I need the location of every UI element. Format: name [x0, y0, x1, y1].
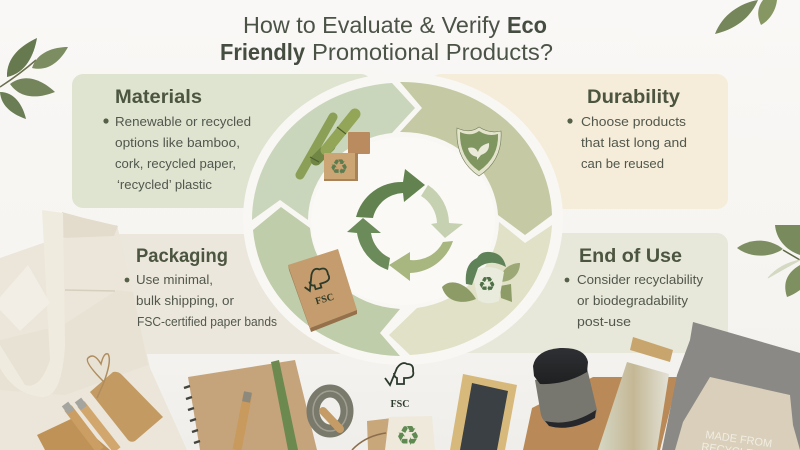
icon: recycled cup with leaves: ♻: [478, 272, 496, 296]
panel: durability: [430, 74, 728, 209]
heading: packaging: Packaging: [136, 246, 228, 267]
body: end of use: Consider recyclability: [577, 272, 704, 287]
body: packaging: bulk shipping, or: [136, 293, 235, 308]
icon: FSC kraft box: [288, 249, 357, 332]
leaves: top left: [0, 38, 68, 119]
felt pouch: [662, 322, 800, 450]
icon: eco shield: [457, 127, 501, 176]
cord coil: [313, 391, 347, 431]
materials text: [103, 87, 251, 192]
cycle ring: [252, 82, 552, 356]
ring backing: [243, 73, 563, 365]
leaves: right: [737, 225, 800, 297]
tote bag: [0, 210, 187, 450]
central cycle arrows: [347, 169, 463, 281]
durability text: [567, 87, 687, 171]
ring segment: end of use: [389, 222, 552, 355]
drawstring bag: [675, 377, 800, 450]
tote card: [0, 265, 50, 331]
bullet: [125, 278, 129, 282]
bamboo pens: [68, 408, 100, 450]
notebook: [184, 360, 317, 450]
arrow: olive bottom: [389, 241, 453, 281]
icon: bamboo, cork and recycled box: [300, 114, 370, 181]
ring segment: durability: [400, 82, 552, 235]
title: Friendly: [220, 39, 305, 65]
body: durability: Choose products: [581, 114, 687, 129]
icon: recycled cup with leaves: [442, 252, 520, 303]
panel: packaging: [100, 234, 340, 354]
body: packaging: [136, 272, 277, 329]
FSC logo: [385, 363, 413, 410]
elastic band: [271, 360, 298, 450]
bullet: [103, 118, 109, 124]
title: Promotional Products?: [312, 39, 553, 65]
heading: materials: Materials: [115, 87, 202, 108]
end of use text: [565, 246, 704, 329]
bullet: [567, 118, 573, 124]
body: durability: can be reused: [581, 156, 664, 171]
body: durability: [581, 114, 687, 171]
travel mug: [533, 348, 597, 428]
ring segment: materials: [252, 83, 415, 220]
title: Eco: [507, 12, 547, 38]
body: packaging: Use minimal,: [136, 272, 213, 287]
body: materials: Renewable or recycled: [115, 114, 251, 129]
body: materials: cork, recycled paper,: [115, 156, 236, 171]
cork mat: [523, 377, 678, 450]
twine loop: [87, 354, 109, 398]
heading: end of use: End of Use: [579, 246, 682, 267]
arrow: green left: [347, 218, 390, 270]
body: materials: ‘recycled’ plastic: [117, 177, 212, 192]
title: [220, 12, 553, 65]
solar power bank: [450, 374, 517, 450]
cork base: [37, 418, 110, 450]
leaves: top right: [715, 0, 777, 34]
panel: end of use: [450, 233, 728, 353]
centre white disc: [311, 137, 495, 305]
body: materials: [115, 114, 251, 192]
panel: materials: [72, 74, 372, 208]
recycled hang tag: [352, 416, 435, 450]
FSC logo: FSC: [391, 399, 409, 410]
body: durability: that last long and: [581, 135, 687, 150]
FSC tree mark: FSC: [314, 292, 335, 307]
bullet: [565, 278, 569, 282]
arrow: dark green top: [356, 169, 425, 218]
body: end of use: post-use: [577, 314, 631, 329]
body: end of use: or biodegradability: [577, 293, 689, 308]
icon: bamboo, cork and recycled box: ♻: [330, 155, 348, 179]
title: How to Evaluate & Verify: [243, 12, 501, 38]
heading: durability: Durability: [587, 87, 680, 108]
body: packaging: FSC-certified paper bands: [137, 314, 277, 329]
body: materials: options like bamboo,: [115, 135, 240, 150]
glass bottle: [598, 337, 673, 450]
bamboo pen: [237, 393, 248, 450]
packaging text: [125, 246, 277, 329]
drawstring bag: MADE FROM: [705, 429, 773, 450]
ring segment: packaging: [253, 207, 400, 356]
arrow: pale green right: [421, 185, 463, 238]
body: end of use: [577, 272, 704, 329]
cork tag: [90, 372, 163, 442]
